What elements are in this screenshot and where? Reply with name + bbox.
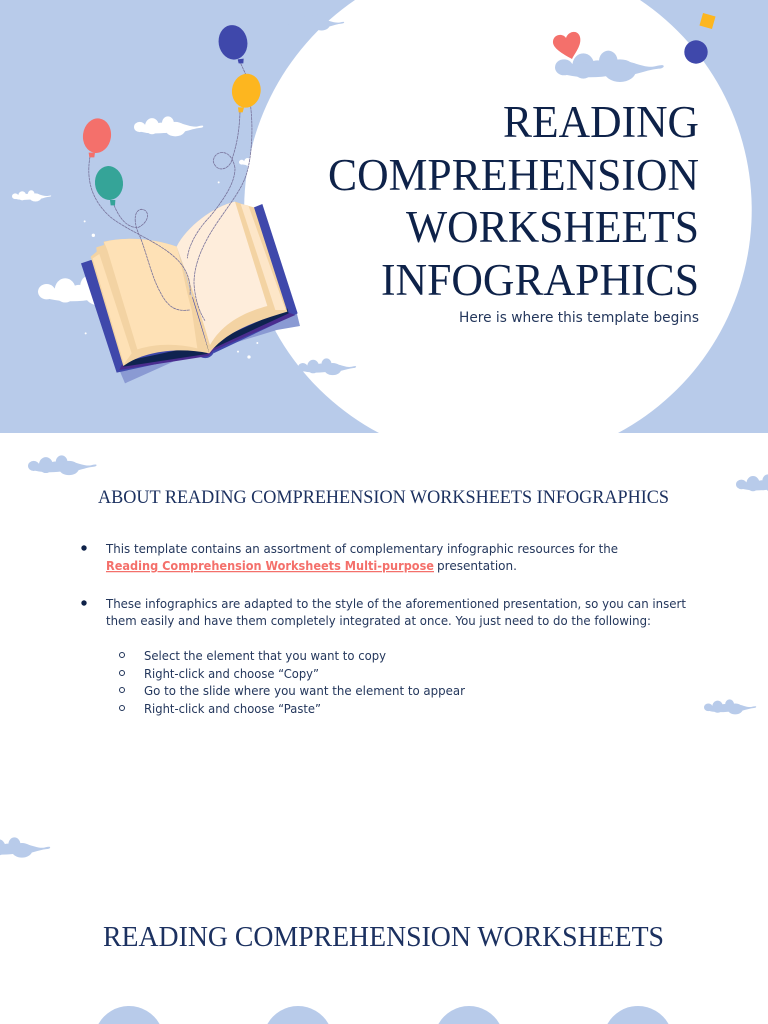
header background	[0, 0, 768, 433]
cloud: about right	[736, 474, 768, 493]
steps list: Go to the slide where you want the element to appear	[144, 683, 466, 698]
cloud: white upper	[134, 116, 203, 136]
paragraph 2: These infographics are adapted to the style of the aforementioned presentation, so you can insert	[105, 596, 686, 611]
cloud: white small	[239, 157, 272, 167]
cloud: white behind book	[38, 276, 142, 306]
title: INFOGRAPHICS	[381, 255, 699, 305]
cloud: white left	[12, 190, 51, 202]
about text	[81, 541, 686, 716]
paragraph 2	[105, 596, 686, 628]
cover inner edge	[119, 313, 295, 370]
sub-bullet markers	[120, 652, 124, 710]
title: WORKSHEETS	[406, 202, 699, 252]
balloon: blue	[216, 23, 250, 63]
left page outer band	[93, 254, 132, 364]
left page block	[91, 239, 209, 366]
balloon: green	[93, 165, 125, 205]
icon: yellow square	[699, 13, 716, 29]
cloud: top right	[555, 51, 664, 82]
cloud: about left	[28, 455, 97, 475]
paragraph 2: them easily and have them completely integrated at once. You just need to do the following:	[106, 613, 651, 628]
subtitle: Here is where this template begins	[459, 310, 699, 326]
title: COMPREHENSION	[328, 150, 699, 200]
cloud: top edge	[288, 14, 344, 31]
book cover right	[200, 204, 298, 353]
paragraph 1: Reading Comprehension Worksheets Multi-purpose	[106, 558, 434, 573]
balloon: red	[81, 117, 113, 157]
cloud: below book	[298, 358, 356, 375]
paragraph 1	[105, 541, 618, 573]
about heading: ABOUT READING COMPREHENSION WORKSHEETS INFOGRAPHICS	[98, 488, 669, 508]
book shadow	[119, 310, 300, 383]
title	[328, 97, 699, 305]
cloud: lower left	[0, 837, 50, 858]
paragraph 1: presentation.	[437, 558, 517, 573]
bullet markers	[81, 545, 87, 606]
icon: heart	[553, 32, 580, 59]
right page	[177, 202, 267, 345]
steps list: Right-click and choose “Copy”	[144, 666, 319, 681]
steps list: Select the element that you want to copy	[144, 648, 387, 663]
balloon: yellow	[230, 72, 263, 112]
worksheet circles	[98, 1006, 669, 1024]
left page	[104, 239, 197, 349]
icon: blue dot	[684, 40, 708, 64]
title: READING	[503, 97, 699, 147]
balloon strings	[89, 63, 252, 321]
illustration: open book with balloons	[81, 23, 300, 383]
white title circle	[244, 0, 752, 433]
steps list	[144, 648, 466, 716]
steps list: Right-click and choose “Paste”	[144, 701, 321, 716]
paragraph 1: This template contains an assortment of complementary infographic resources for the	[105, 541, 618, 556]
right page block	[177, 202, 287, 353]
cloud: list right	[704, 699, 756, 714]
right page band	[241, 204, 286, 310]
sparkles	[84, 181, 258, 359]
book cover left	[81, 260, 213, 373]
worksheets heading: READING COMPREHENSION WORKSHEETS	[103, 922, 664, 953]
